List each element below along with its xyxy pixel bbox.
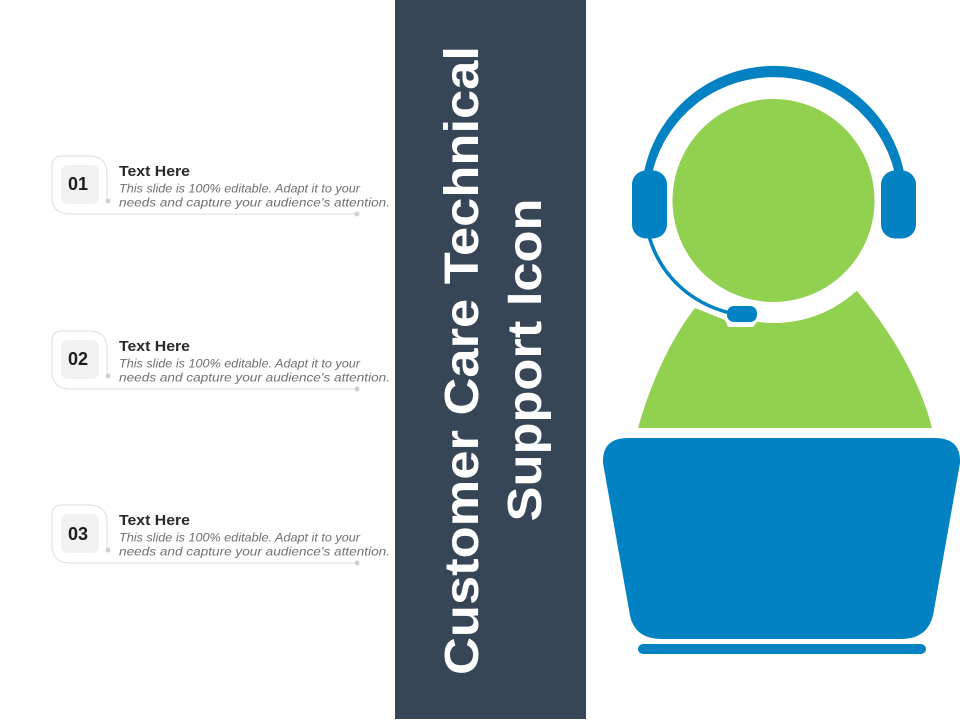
laptop base — [638, 644, 926, 654]
item 02: Text Here — [119, 339, 190, 355]
title text: Customer Care Technical — [436, 46, 489, 675]
icon: laptop — [603, 438, 960, 654]
item 02 — [52, 331, 390, 392]
item 01: needs and capture your audience's attention. — [119, 198, 390, 210]
agent body — [638, 291, 932, 428]
title text — [436, 46, 552, 675]
item 02: needs and capture your audience's attention. — [119, 372, 390, 384]
item 01: 01 — [68, 174, 88, 194]
right ear cup — [881, 170, 916, 238]
item 01: Text Here — [119, 164, 190, 180]
item 01 — [52, 156, 390, 216]
item 03: 03 — [68, 524, 88, 544]
item 03: needs and capture your audience's attention. — [119, 546, 390, 558]
item 02: This slide is 100% editable. Adapt it to your — [119, 358, 361, 370]
item 01: This slide is 100% editable. Adapt it to your — [119, 184, 361, 196]
microphone boom — [649, 236, 730, 313]
title text: Support Icon — [499, 198, 552, 522]
title panel — [395, 0, 586, 719]
agent head — [672, 99, 874, 302]
item 03 — [52, 505, 390, 566]
icon: support agent — [632, 66, 932, 428]
item 03: This slide is 100% editable. Adapt it to your — [119, 532, 361, 544]
headset band — [644, 66, 904, 172]
microphone — [727, 306, 757, 322]
left ear cup — [632, 170, 667, 238]
item 03: Text Here — [119, 513, 190, 529]
item 02: 02 — [68, 349, 88, 369]
